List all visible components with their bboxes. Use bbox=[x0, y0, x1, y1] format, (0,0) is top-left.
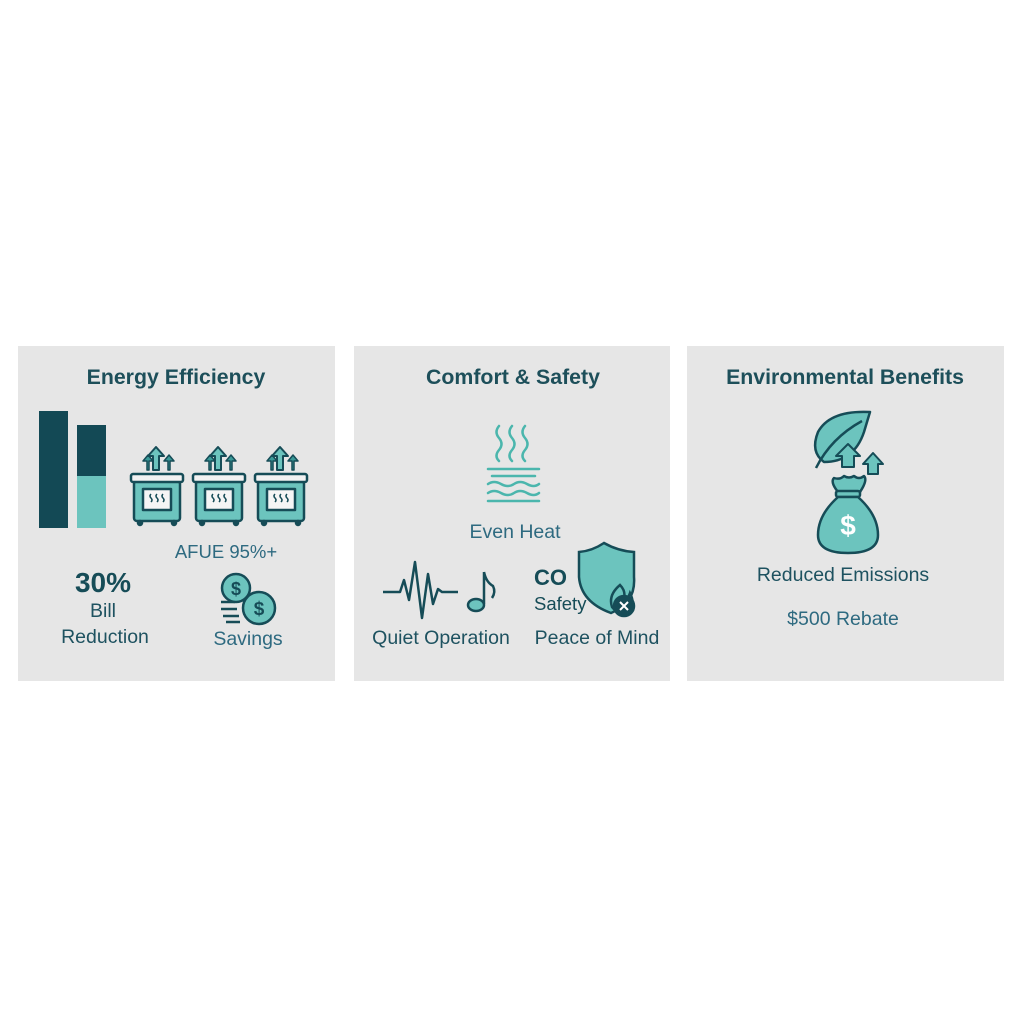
icon: coins: $ bbox=[231, 579, 241, 599]
icon: shield bbox=[579, 543, 634, 616]
heading: Comfort & Safety bbox=[426, 365, 600, 389]
icon: money bag: $ bbox=[840, 510, 856, 541]
text: 30% bill reduction: 30% bbox=[75, 567, 131, 598]
text: CO Safety bbox=[534, 565, 587, 614]
text: 30% bill reduction: Bill bbox=[90, 600, 116, 622]
text: 30% bill reduction: Reduction bbox=[61, 626, 149, 648]
heading: Environmental Benefits bbox=[726, 365, 964, 389]
text: 30% bill reduction bbox=[61, 567, 149, 648]
icon: leaf bbox=[815, 412, 883, 474]
text: rebate: $500 Rebate bbox=[787, 608, 899, 630]
icon: furnaces bbox=[131, 447, 307, 525]
icon: coins bbox=[221, 574, 275, 624]
text: AFUE: AFUE 95%+ bbox=[175, 541, 277, 562]
heading: Energy Efficiency: Energy Efficiency bbox=[87, 365, 266, 389]
text: Quiet Operation: Quiet Operation bbox=[372, 627, 510, 649]
panel: comfort & safety bbox=[354, 346, 670, 681]
text: CO Safety: Safety bbox=[534, 593, 587, 614]
panel: environmental benefits bbox=[687, 346, 1004, 681]
icon: money bag bbox=[818, 476, 878, 553]
text: Reduced Emissions: Reduced Emissions bbox=[757, 564, 929, 586]
icon: even heat bbox=[488, 426, 539, 501]
bar chart bbox=[39, 411, 106, 528]
icon: coins: $ bbox=[254, 599, 265, 620]
text: Peace of Mind: Peace of Mind bbox=[535, 627, 659, 649]
panel: energy efficiency bbox=[18, 346, 335, 681]
icon: waveform + note bbox=[383, 562, 494, 618]
text: CO Safety: CO bbox=[534, 565, 567, 590]
text: Even Heat: Even Heat bbox=[469, 521, 561, 543]
text: Savings: Savings bbox=[213, 628, 283, 650]
